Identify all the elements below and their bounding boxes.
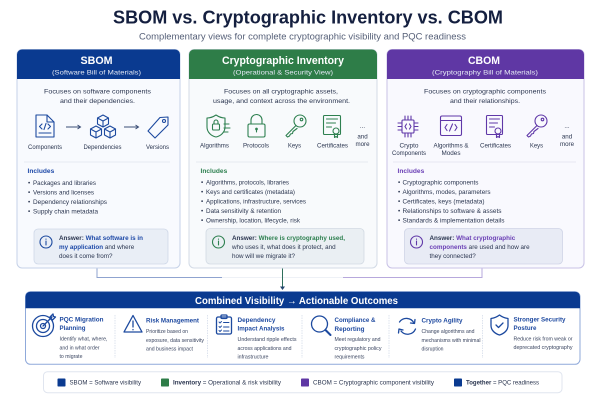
SBOM includes list: Includes	[28, 168, 55, 175]
SBOM includes list: Packages and libraries	[33, 180, 96, 187]
icon: info	[40, 236, 52, 248]
SBOM subheading: (Software Bill of Materials)	[52, 70, 141, 76]
legend	[44, 372, 562, 393]
Inventory includes list: Applications, infrastructure, services	[206, 198, 306, 206]
outcome: Crypto Agility: mechanisms with minimal	[422, 338, 480, 344]
Inventory labels: Certificates	[317, 142, 348, 150]
icon: info	[212, 236, 224, 248]
outcome: Compliance & Reporting: Compliance &	[334, 317, 376, 324]
outcome: Compliance & Reporting: cryptographic policy	[334, 346, 382, 352]
CBOM focus text	[424, 88, 547, 105]
icon: clipboard checklist	[216, 315, 232, 334]
Inventory answer callout: Answer: Where is cryptography used,	[232, 235, 345, 242]
connector: centre line	[222, 276, 343, 278]
"and more" note: more	[355, 141, 370, 148]
Inventory includes list: •	[201, 198, 203, 206]
icon: magnifier	[312, 316, 330, 335]
outcome: Crypto Agility	[398, 318, 480, 352]
icon: tag	[148, 117, 168, 138]
outcome: Dependency Impact Analysis: Impact Analysis	[238, 326, 285, 332]
title: SBOM vs. Cryptographic Inventory vs. CBOM	[113, 6, 503, 28]
SBOM focus text: and their dependencies.	[60, 98, 135, 105]
panel: combined outcomes	[26, 292, 580, 364]
CBOM heading: CBOM	[468, 55, 500, 67]
Inventory includes list: Keys and certificates (metadata)	[206, 189, 295, 196]
Inventory includes list: Includes	[200, 168, 228, 175]
Inventory includes list: Data sensitivity & retention	[206, 208, 281, 215]
"and more" note: more	[560, 141, 575, 148]
Inventory labels: Keys	[288, 142, 301, 150]
"and more" note	[560, 123, 575, 148]
icon: padlock	[248, 114, 265, 137]
connector: CBOM to outcomes	[343, 268, 482, 278]
outcome: PQC Migration Planning: and in what order	[60, 346, 100, 352]
SBOM answer callout	[34, 229, 168, 264]
CBOM includes list	[398, 168, 504, 224]
panel: SBOM	[17, 50, 180, 268]
legend: CBOM: CBOM = Cryptographic component visibility	[313, 380, 435, 386]
CBOM focus text: Focuses on cryptographic components	[424, 88, 547, 96]
icon: chip	[398, 116, 418, 137]
panel: Cryptographic Inventory	[189, 50, 377, 268]
"and more" note: and	[357, 134, 368, 140]
CBOM answer callout: Answer: What cryptographic	[430, 235, 516, 242]
icon: certificate	[486, 116, 502, 138]
Inventory labels: Algorithms	[200, 142, 229, 150]
icon: circular arrows	[398, 318, 416, 334]
icon: key	[286, 115, 306, 137]
outcome: PQC Migration Planning: Planning	[60, 325, 86, 332]
arrow	[66, 125, 80, 129]
SBOM labels: Components	[28, 144, 62, 151]
CBOM includes list: Relationships to software & assets	[402, 208, 502, 215]
SBOM labels	[28, 144, 169, 151]
outcome: Compliance & Reporting: Meet regulatory and	[334, 337, 381, 343]
outcome: Compliance & Reporting: Reporting	[334, 326, 365, 333]
outcome: Compliance & Reporting	[312, 316, 382, 360]
SBOM answer callout: Answer: What software is in	[59, 235, 143, 242]
outcome: Dependency Impact Analysis: Understand ripple effects	[238, 337, 297, 343]
Inventory heading: Cryptographic Inventory	[222, 55, 344, 67]
outcomes heading: Combined Visibility → Actionable Outcomes	[195, 296, 398, 307]
outcome: Dependency Impact Analysis	[216, 315, 297, 360]
legend: Together: Together = PQC readiness	[466, 380, 539, 386]
outcome: PQC Migration Planning: Identify what, where,	[60, 336, 108, 342]
legend: SBOM: SBOM = Software visibility	[70, 380, 142, 386]
CBOM labels: Keys	[530, 142, 543, 150]
CBOM includes list: Certificates, keys (metadata)	[402, 198, 484, 206]
outcome: Stronger Security Posture: Posture	[514, 325, 537, 332]
Inventory answer callout: who uses it, what does it protect, and	[231, 244, 336, 251]
Inventory includes list: •	[201, 208, 203, 215]
CBOM includes list: Standards & implementation details	[402, 218, 504, 224]
outcome: Crypto Agility: Crypto Agility	[422, 318, 463, 324]
outcomes header	[26, 292, 580, 308]
arrow: inventory to outcomes	[280, 268, 285, 290]
SBOM includes list: •	[28, 208, 30, 216]
SBOM includes list: •	[28, 180, 30, 187]
Inventory header	[189, 50, 377, 79]
Inventory includes list: •	[201, 189, 203, 196]
SBOM includes list: •	[28, 199, 30, 206]
CBOM includes list: Cryptographic components	[402, 180, 478, 186]
Inventory labels	[200, 142, 348, 150]
connector: SBOM to outcomes	[97, 268, 222, 278]
outcome: Compliance & Reporting: requirements	[334, 354, 365, 360]
outcome: Stronger Security Posture	[491, 315, 573, 351]
"and more" note: ...	[564, 123, 570, 130]
icon: info	[410, 236, 422, 248]
outcome: Risk Management	[124, 316, 204, 352]
CBOM includes list: •	[398, 189, 400, 196]
SBOM includes list: •	[28, 190, 30, 196]
CBOM subheading: (Cryptography Bill of Materials)	[432, 70, 538, 76]
outcome: PQC Migration Planning: PQC Migration	[60, 316, 104, 324]
SBOM labels: Versions	[146, 144, 169, 151]
CBOM labels: Modes	[442, 150, 460, 157]
outcome: Risk Management: Prioritize based on	[146, 329, 188, 335]
SBOM includes list: Supply chain metadata	[33, 208, 99, 216]
icon: shield lock	[207, 115, 230, 137]
SBOM answer callout: does it come from?	[59, 253, 113, 260]
icon: certificate	[324, 116, 340, 138]
CBOM labels: Components	[392, 150, 426, 157]
SBOM header	[17, 50, 180, 79]
outcome: Dependency Impact Analysis: across applications and	[238, 346, 292, 352]
CBOM labels	[392, 142, 543, 157]
Inventory subheading: (Operational & Security View)	[233, 70, 333, 76]
CBOM answer callout: they connected?	[430, 253, 476, 260]
icon: key	[527, 115, 547, 137]
SBOM focus text	[44, 88, 152, 105]
CBOM labels: Certificates	[480, 142, 511, 150]
SBOM answer callout: my application and where	[59, 244, 135, 251]
outcome: PQC Migration Planning	[32, 314, 108, 360]
outcome: Crypto Agility: Change algorithms and	[422, 329, 475, 335]
panel: CBOM	[387, 50, 584, 268]
CBOM includes list: •	[398, 218, 400, 224]
Inventory includes list	[200, 168, 306, 224]
outcome: Risk Management: and business impact	[146, 346, 194, 352]
CBOM focus text: and their relationships.	[450, 98, 520, 105]
icon: target	[32, 314, 56, 336]
SBOM includes list: Versions and licenses	[33, 190, 94, 196]
outcome: Dependency Impact Analysis: Dependency	[238, 317, 276, 324]
"and more" note: and	[562, 134, 573, 140]
Inventory includes list: •	[201, 218, 203, 224]
arrow	[124, 125, 138, 129]
CBOM includes list: •	[398, 208, 400, 215]
CBOM includes list: •	[398, 180, 400, 186]
CBOM labels: Algorithms &	[434, 142, 469, 150]
CBOM header	[387, 50, 584, 79]
icon: warning triangle	[124, 316, 142, 332]
CBOM labels: Crypto	[400, 142, 419, 150]
outcome: Stronger Security Posture: deprecated cryptography	[514, 345, 573, 351]
icon: dependency cubes	[90, 115, 116, 138]
Inventory includes list: •	[201, 180, 203, 186]
CBOM includes list: •	[398, 198, 400, 206]
outcome: Stronger Security Posture: Stronger Security	[514, 316, 566, 324]
"and more" note: ...	[360, 123, 365, 130]
SBOM includes list: Dependency relationships	[33, 199, 107, 206]
Inventory focus text	[213, 88, 350, 105]
icon: code document	[36, 115, 54, 137]
Inventory includes list: Algorithms, protocols, libraries	[206, 180, 289, 186]
Inventory focus text: usage, and context across the environment.	[213, 98, 350, 105]
CBOM includes list: Includes	[398, 168, 425, 175]
Inventory answer callout	[206, 228, 364, 264]
Inventory focus text: Focuses on all cryptographic assets,	[224, 88, 338, 96]
Inventory labels: Protocols	[243, 142, 269, 150]
SBOM labels: Dependencies	[84, 144, 122, 151]
outcome: Crypto Agility: disruption	[422, 346, 444, 352]
CBOM includes list: Algorithms, modes, parameters	[402, 189, 490, 196]
outcome: PQC Migration Planning: to migrate	[60, 354, 83, 360]
SBOM includes list	[28, 168, 107, 216]
legend: Inventory: Inventory = Operational & risk visibility	[173, 380, 282, 386]
outcome: Dependency Impact Analysis: infrastructure	[238, 354, 269, 360]
outcome: Risk Management: Risk Management	[146, 318, 200, 324]
icon: shield check	[491, 315, 508, 335]
SBOM heading: SBOM	[80, 55, 113, 67]
subtitle: Complementary views for complete cryptographic visibility and PQC readiness	[139, 32, 467, 42]
outcome: Stronger Security Posture: Reduce risk from weak or	[514, 336, 573, 342]
SBOM focus text: Focuses on software components	[44, 88, 152, 96]
"and more" note	[355, 123, 370, 148]
CBOM answer callout: components are used and how are	[430, 244, 530, 251]
Inventory answer callout: how will we migrate it?	[232, 253, 295, 260]
icon: code window	[440, 116, 462, 136]
outcome: Risk Management: exposure, data sensitivity	[146, 338, 204, 344]
CBOM answer callout	[404, 228, 562, 264]
Inventory includes list: Ownership, location, lifecycle, risk	[206, 218, 301, 224]
